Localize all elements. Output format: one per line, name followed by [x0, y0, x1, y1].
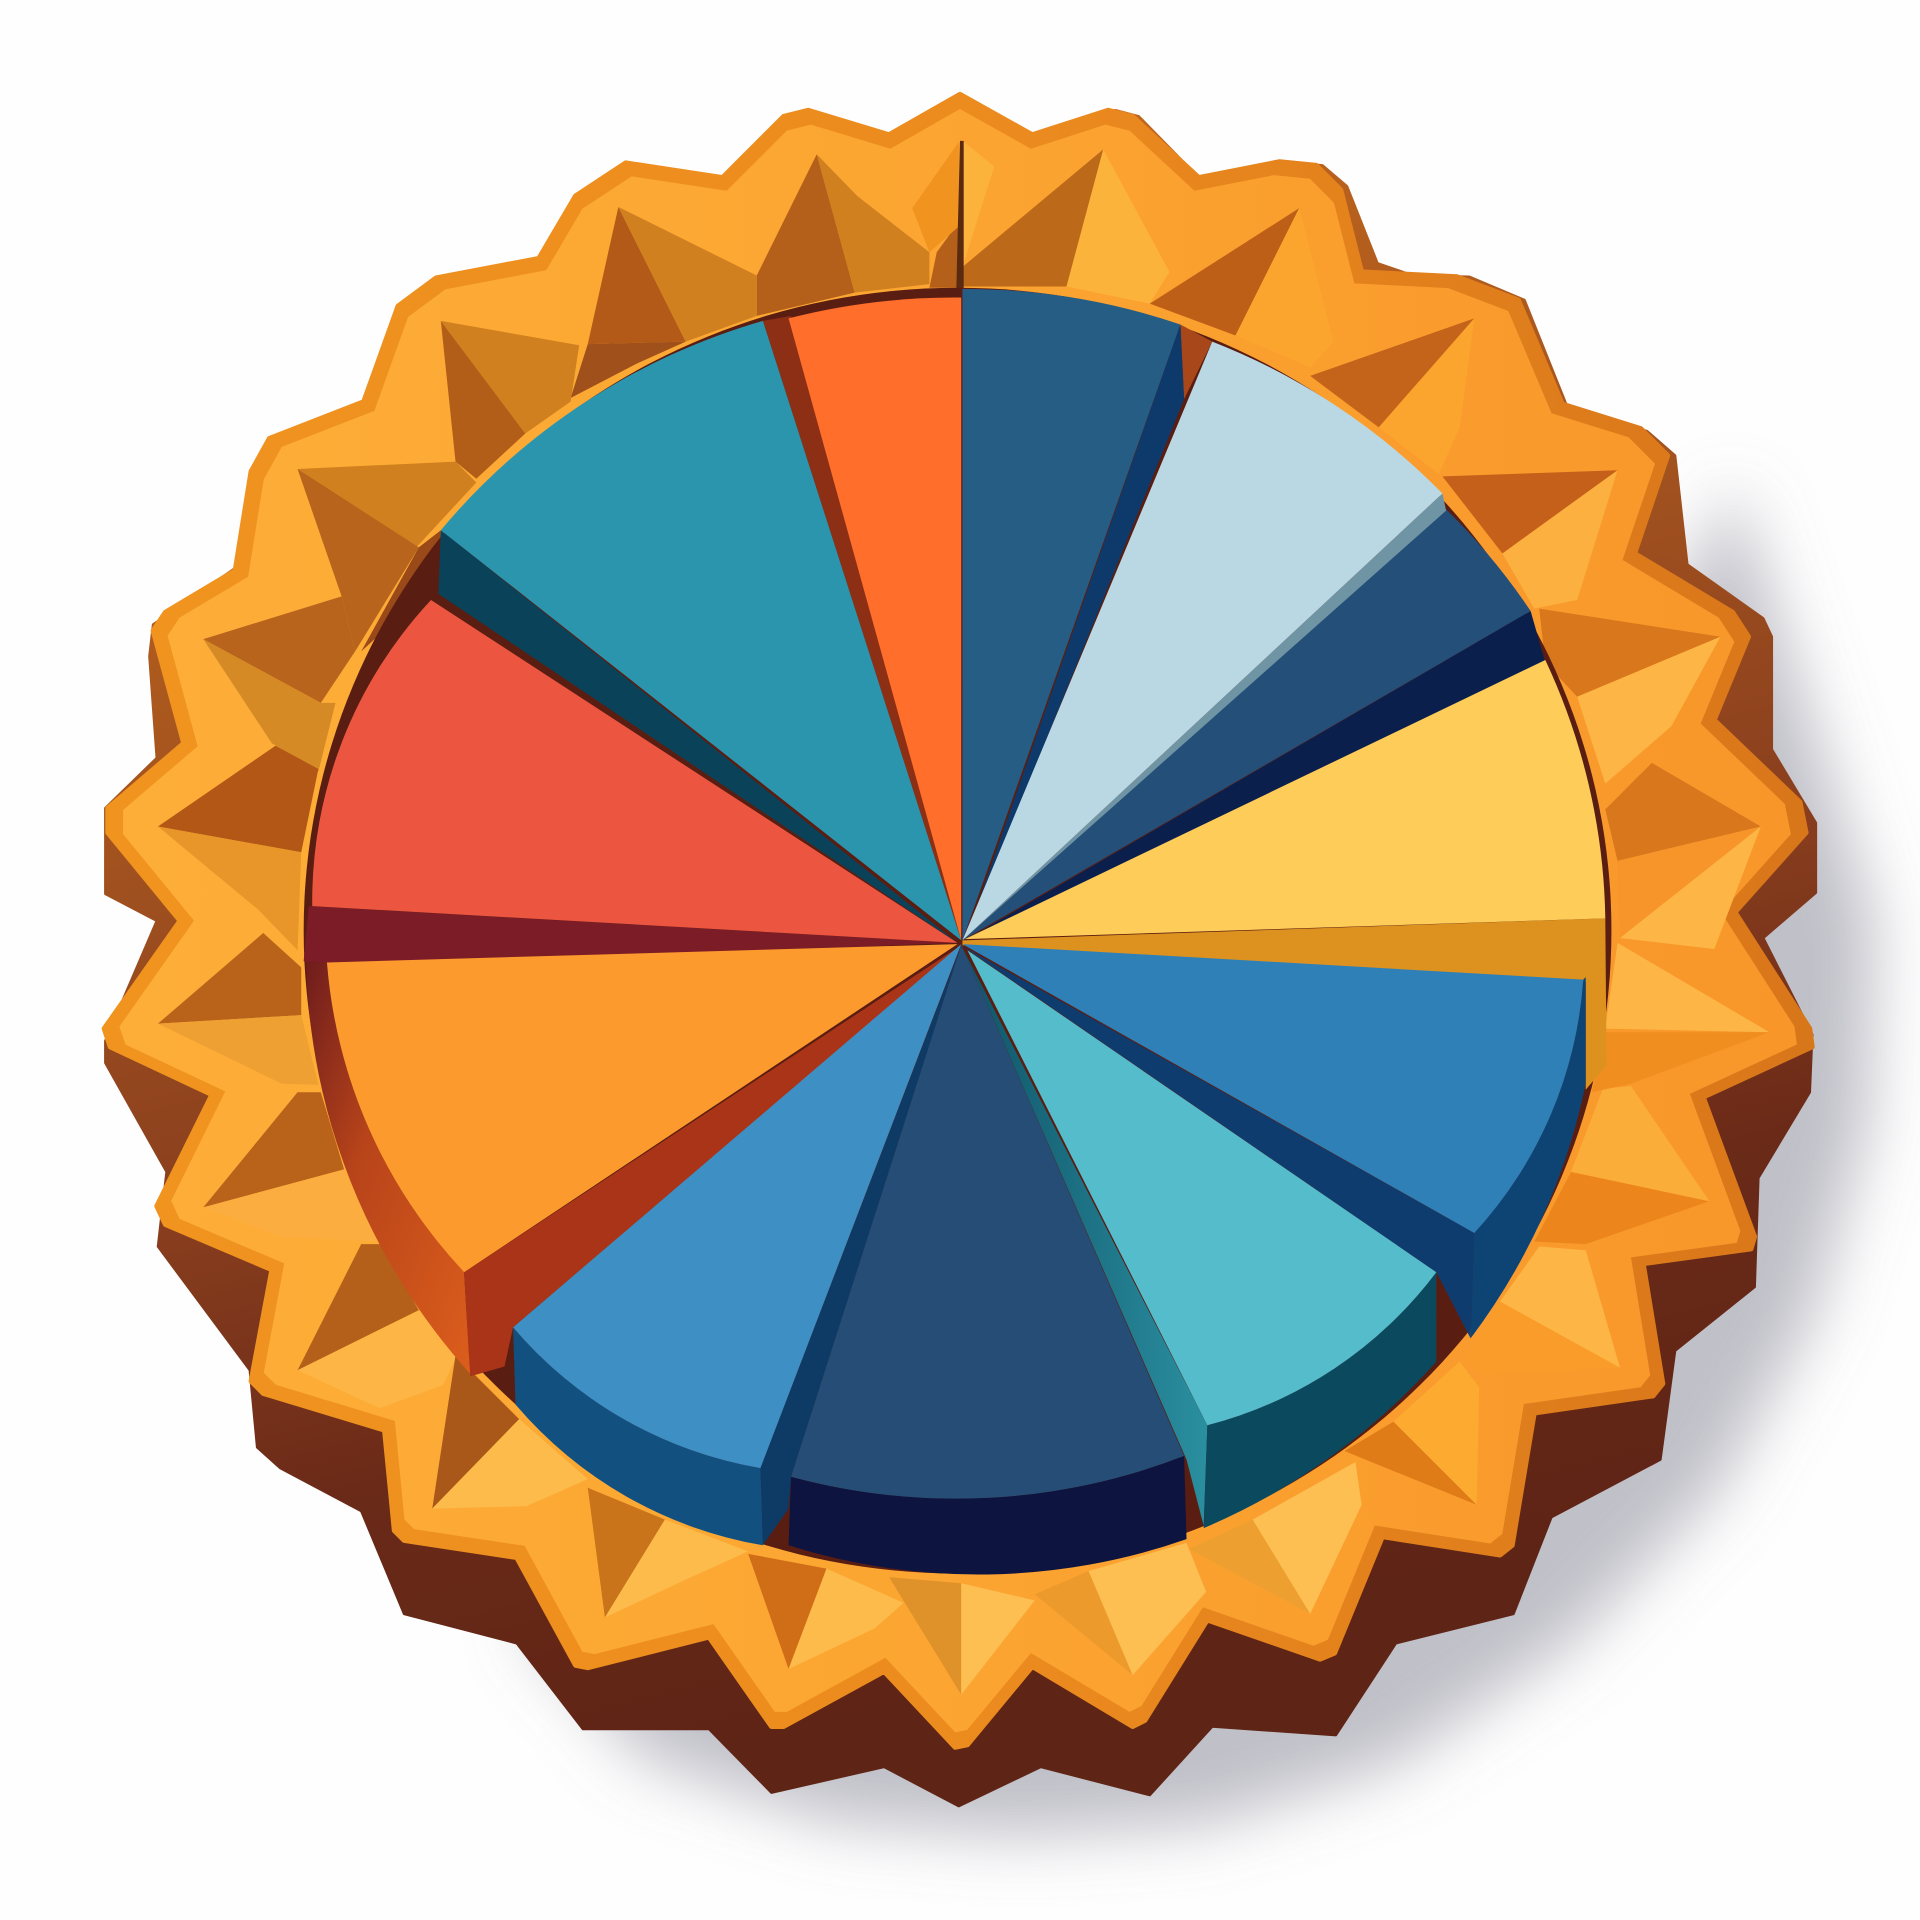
slice: blue right: [961, 944, 1586, 1338]
recessed circular well: [304, 288, 1611, 1573]
slice: navy bottom: [789, 945, 1187, 1575]
slice: red: [304, 600, 958, 967]
faceted star points around the rim: [158, 141, 1769, 1695]
slice: dark blue wedge: [962, 508, 1545, 940]
slice: yellow: [962, 660, 1607, 1090]
badge side wall: [105, 94, 1816, 1806]
slice: light blue: [962, 342, 1446, 940]
slice: orange: [306, 944, 961, 1376]
slice: orange-red top: [763, 298, 961, 940]
drop shadow: [524, 485, 1875, 1836]
slice: blue lower left: [513, 944, 961, 1545]
pie chart slices: [304, 289, 1607, 1575]
badge rim top face: [104, 94, 1812, 1747]
slice: teal: [438, 321, 961, 943]
slice: cyan: [961, 945, 1436, 1528]
slice: dark blue top: [962, 289, 1212, 940]
